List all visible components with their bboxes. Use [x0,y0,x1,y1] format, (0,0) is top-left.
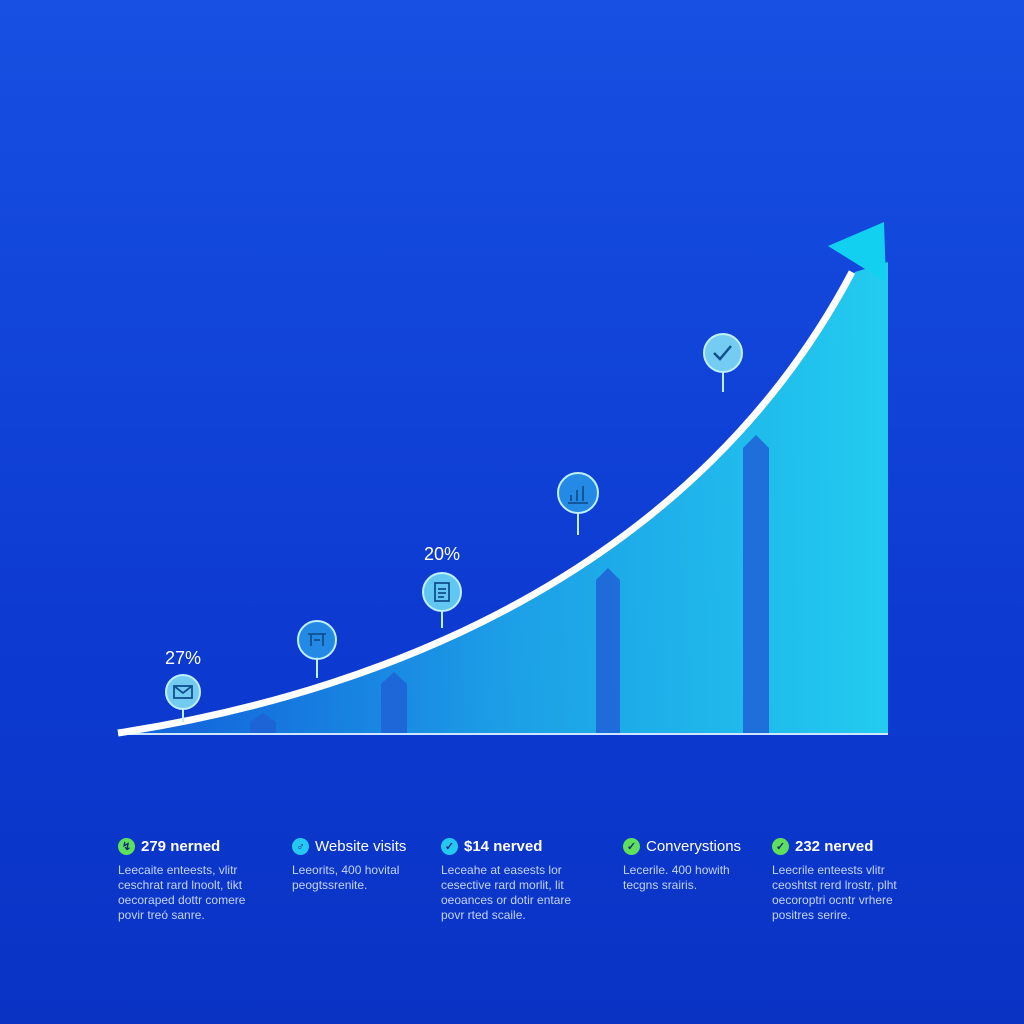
stat 4 [623,838,741,892]
bars [250,435,769,733]
stat 3: povr rted scaile. [441,908,526,922]
pins [166,334,742,722]
stat 3: oeoances or dotir entare [441,893,571,907]
stat 5 [772,838,897,922]
stat 1 [118,838,245,922]
stat 2 [292,838,406,892]
stat 1: 279 nerned [141,838,220,855]
stat 3: cesective rard morlit, lit [441,878,564,892]
chart [118,222,888,736]
percent labels: 27% [165,648,201,668]
growth curve arrow [118,222,886,733]
pin icons [174,346,731,698]
stat 4: Lecerile. 400 howith [623,863,730,877]
stat 1: povir treó sanre. [118,908,205,922]
stat 5: 232 nerved [795,838,873,855]
stat 1: oecoraped dottr comere [118,893,245,907]
stat 3 [441,838,571,922]
stat 5: oecoroptri ocntr vrhere [772,893,893,907]
stat 1: Leecaite enteests, vlitr [118,863,237,877]
stat 5: ✓ [776,841,785,853]
stat 4: ✓ [627,841,636,853]
stat 5: Leecrile enteests vlitr [772,863,885,877]
stat 1: ceschrat rard lnoolt, tikt [118,878,242,892]
stat 3: ✓ [445,841,454,853]
stat 4: Converystions [646,838,741,855]
stat 4: tecgns srairis. [623,878,697,892]
percent labels: 20% [424,544,460,564]
stat 3: $14 nerved [464,838,542,855]
stat 2: Leeorits, 400 hovital [292,863,399,877]
stat 1: ↯ [122,841,131,853]
area fill [118,262,888,733]
stat 2: Website visits [315,838,406,855]
percent labels [165,544,460,668]
baseline [118,733,888,735]
stat 3: Leceahe at easests lor [441,863,562,877]
stat 5: ceoshtst rerd lrostr, plht [772,878,897,892]
stat 5: positres serire. [772,908,851,922]
stat 2: peogtssrenite. [292,878,367,892]
stat 2: ♂ [296,840,305,852]
